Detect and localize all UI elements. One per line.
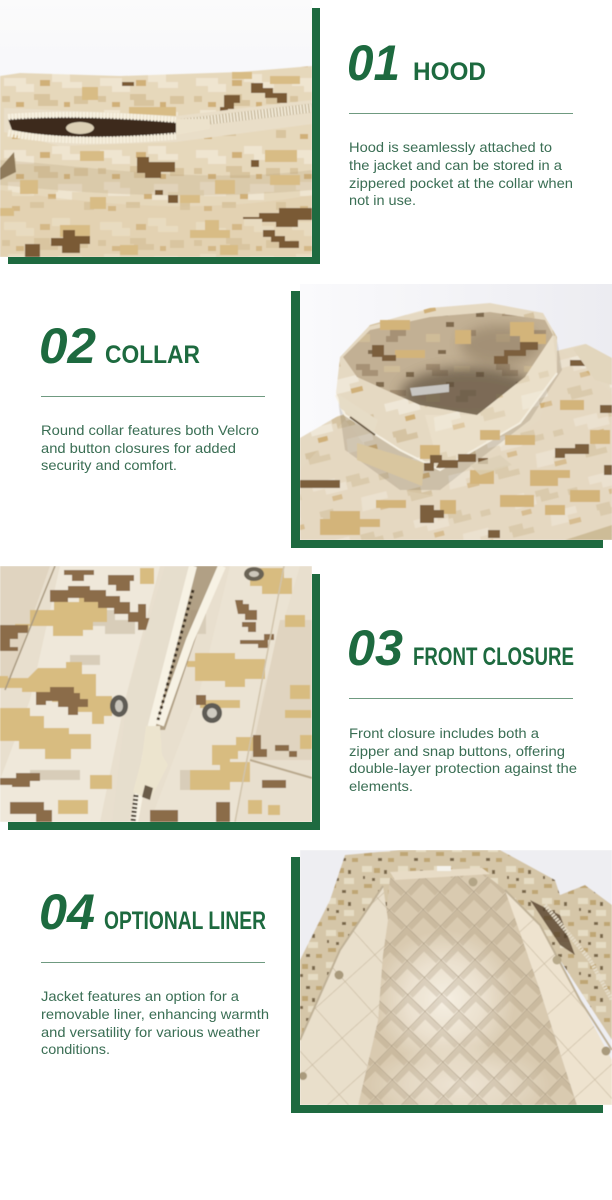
liner back (358, 872, 577, 1105)
velcro patch (357, 443, 424, 486)
zipper tape (4, 100, 312, 146)
photo: hood zipper pocket (0, 65, 312, 257)
green frame (8, 574, 320, 830)
placket (145, 618, 164, 636)
description (349, 725, 577, 794)
description: double-layer protection against the (349, 760, 577, 776)
left liner panel (300, 886, 388, 1105)
description: Hood is seamlessly attached to (349, 139, 552, 155)
description: and button closures for added (41, 440, 236, 456)
description: elements. (349, 778, 413, 794)
label: COLLAR (105, 341, 200, 369)
zipper slider (136, 726, 161, 796)
description: zipper and snap buttons, offering (349, 743, 565, 759)
description (349, 139, 573, 208)
description: security and comfort. (41, 457, 177, 473)
label: OPTIONAL LINER (104, 907, 266, 935)
number: 01 (347, 35, 400, 91)
description (41, 988, 269, 1057)
description: not in use. (349, 192, 416, 208)
green frame (291, 291, 603, 548)
heading (39, 884, 266, 940)
photo: quilted liner (299, 850, 612, 1125)
description: Jacket features an option for a (41, 988, 239, 1004)
description: conditions. (41, 1041, 110, 1057)
green frame (291, 857, 603, 1113)
photo: front closure zipper and snaps (0, 566, 312, 822)
green frame (8, 8, 320, 264)
snaps (334, 970, 344, 980)
description: Round collar features both Velcro (41, 422, 259, 438)
description: Front closure includes both a (349, 725, 539, 741)
description: zippered pocket at the collar when (349, 175, 573, 191)
panel: optional liner (39, 850, 612, 1125)
number: 03 (347, 620, 403, 676)
number: 02 (39, 318, 96, 374)
photo: round collar (300, 284, 612, 540)
description: and versatility for various weather (41, 1024, 260, 1040)
snaps (110, 695, 128, 717)
panel: collar (39, 284, 612, 548)
number: 04 (39, 884, 95, 940)
panel: hood (0, 0, 573, 264)
label: HOOD (413, 58, 486, 86)
heading (347, 620, 574, 676)
description (41, 422, 259, 473)
heading (347, 35, 486, 91)
right liner panel (505, 890, 612, 1105)
description: removable liner, enhancing warmth (41, 1006, 269, 1022)
description: the jacket and can be stored in a (349, 157, 562, 173)
panel: front closure (0, 566, 577, 830)
heading (39, 318, 200, 374)
